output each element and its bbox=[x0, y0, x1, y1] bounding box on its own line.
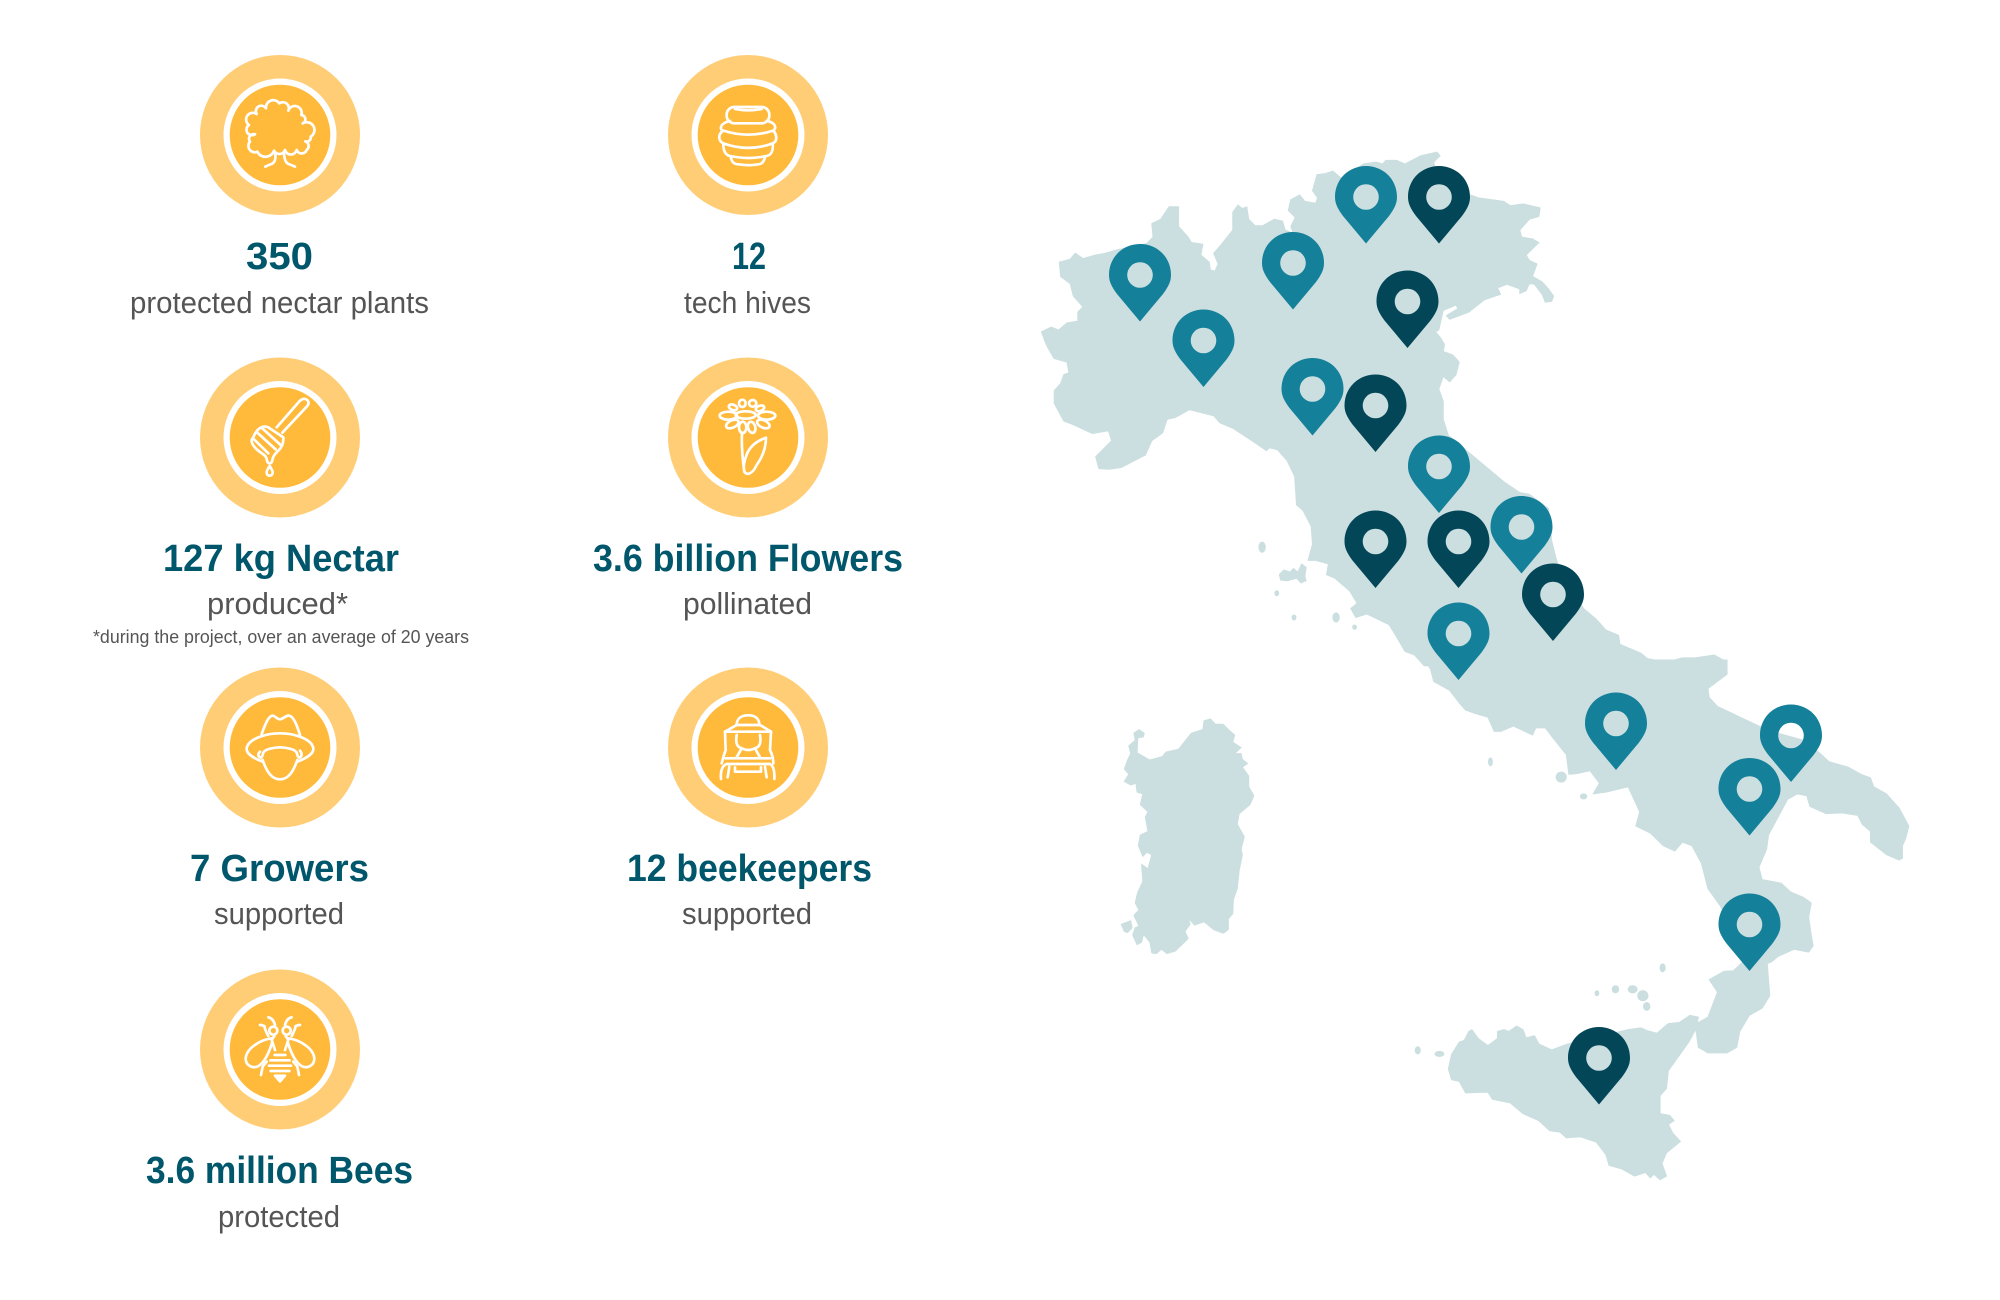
icon: bee bbox=[246, 1017, 314, 1081]
description: produced* bbox=[207, 586, 348, 621]
pin: teal Trentino bbox=[1335, 166, 1397, 244]
pin: dark Umbria bbox=[1428, 510, 1490, 588]
description: supported bbox=[214, 896, 344, 931]
pin: dark Sicily bbox=[1568, 1027, 1630, 1104]
value: 127 kg Nectar bbox=[163, 538, 399, 580]
stat: 12 beekeepers supported bbox=[627, 668, 872, 931]
icon: beehive bbox=[719, 107, 776, 165]
badge circle bbox=[668, 668, 828, 828]
stat: 12 tech hives bbox=[668, 55, 828, 320]
description: supported bbox=[682, 896, 812, 931]
description: pollinated bbox=[683, 586, 812, 621]
description: protected bbox=[218, 1199, 340, 1234]
icon: beekeeper bbox=[721, 715, 774, 779]
stat: 3.6 billion Flowers pollinated bbox=[593, 358, 903, 621]
badge circle bbox=[668, 358, 828, 518]
pin: dark Emilia east bbox=[1344, 374, 1406, 452]
badge circle bbox=[200, 970, 360, 1130]
icon: grower with hat bbox=[247, 716, 313, 779]
badge circle bbox=[668, 55, 828, 215]
stat: 350 protected nectar plants bbox=[130, 55, 429, 320]
pin: teal Marche bbox=[1408, 436, 1470, 513]
pin: dark Abruzzo bbox=[1522, 564, 1584, 641]
map of Italy bbox=[1041, 152, 1909, 1180]
icon: tree bbox=[246, 100, 314, 167]
pin: teal Puglia bbox=[1760, 704, 1822, 782]
pin: teal Marche south bbox=[1490, 496, 1552, 574]
stat: 3.6 million Bees protected bbox=[146, 970, 413, 1234]
pin: teal Basilicata bbox=[1718, 758, 1780, 836]
stat: 7 Growers supported bbox=[190, 668, 369, 931]
value: 3.6 billion Flowers bbox=[593, 538, 903, 580]
stat: 127 kg Nectar produced bbox=[93, 358, 469, 647]
footnote: *during the project, over an average of 20 years bbox=[93, 627, 469, 647]
map pins bbox=[1109, 166, 1822, 1104]
value: 350 bbox=[246, 236, 313, 278]
northern and central mainland bbox=[1041, 152, 1727, 666]
pin: teal Piedmont south bbox=[1172, 310, 1234, 387]
value: 12 beekeepers bbox=[627, 848, 872, 890]
badge circle bbox=[200, 358, 360, 518]
value: 12 bbox=[732, 236, 766, 278]
pin: dark Friuli bbox=[1408, 166, 1470, 244]
badge circle bbox=[200, 55, 360, 215]
pin: teal Lombardy bbox=[1262, 232, 1324, 310]
badge circle bbox=[200, 668, 360, 828]
pin: teal Emilia west bbox=[1282, 358, 1344, 436]
pin: teal Piedmont north bbox=[1109, 244, 1171, 322]
description: tech hives bbox=[684, 285, 811, 320]
icon: flower bbox=[720, 400, 775, 474]
pin: teal Calabria bbox=[1718, 894, 1780, 971]
southern mainland, Sardinia and Sicily bbox=[1121, 660, 1909, 1180]
value: 7 Growers bbox=[190, 848, 369, 890]
description: protected nectar plants bbox=[130, 285, 429, 320]
icon: honey dipper bbox=[252, 399, 309, 476]
pin: dark Veneto bbox=[1376, 270, 1438, 348]
pin: teal Lazio bbox=[1428, 602, 1490, 680]
pin: teal Campania bbox=[1585, 692, 1647, 770]
value: 3.6 million Bees bbox=[146, 1150, 413, 1192]
pin: dark Tuscany bbox=[1344, 510, 1406, 588]
